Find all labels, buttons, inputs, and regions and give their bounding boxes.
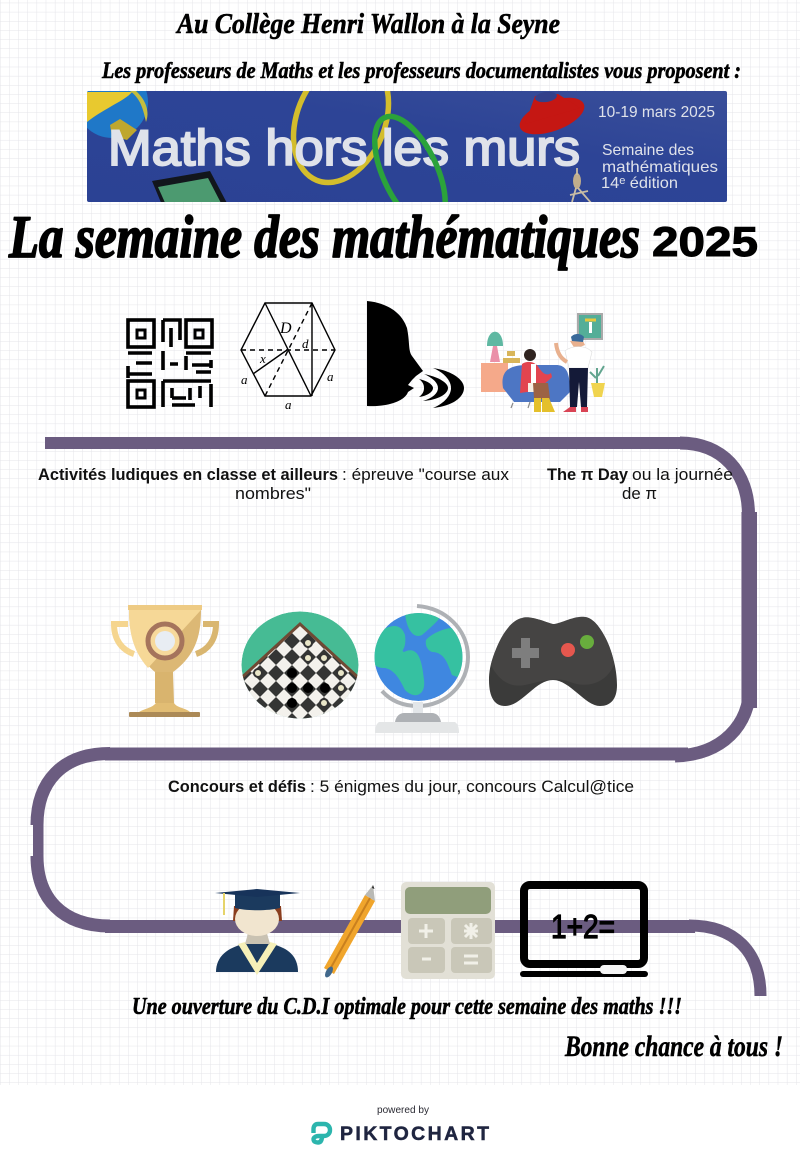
footer caption: powered by bbox=[377, 1104, 430, 1116]
icon: hexagon geometry: a bbox=[327, 369, 334, 384]
text: activities: Activités ludiques en classe et ailleurs bbox=[38, 465, 338, 484]
icon: hexagon geometry: D bbox=[279, 320, 292, 337]
books bbox=[503, 351, 520, 363]
main title: La semaine des mathématiques bbox=[8, 204, 640, 270]
icon: red cone bbox=[520, 92, 584, 134]
banner: Maths hors les murs bbox=[87, 91, 727, 202]
icon: trophy bbox=[114, 605, 216, 717]
plant bbox=[590, 366, 604, 383]
text: pi day bbox=[547, 465, 733, 503]
timeline path bbox=[33, 443, 760, 996]
banner subtitle bbox=[602, 144, 718, 188]
picture bbox=[577, 313, 603, 340]
woman bbox=[520, 362, 552, 393]
banner subtitle: 14ᵉ édition bbox=[601, 175, 678, 192]
banner title: Maths hors les murs bbox=[108, 120, 580, 176]
icon: QR code bbox=[128, 320, 212, 407]
lamp bbox=[487, 332, 503, 346]
text: pi day: The π Day bbox=[547, 465, 629, 484]
icon: Piktochart logo bbox=[314, 1124, 330, 1142]
icon: yellow hoop bbox=[290, 91, 392, 186]
icon: blackboard with sum: 1+2= bbox=[551, 908, 615, 945]
icon: game controller bbox=[489, 617, 617, 706]
text: activities: nombres" bbox=[235, 484, 311, 503]
icon: two people in living room bbox=[481, 313, 605, 412]
main title: 2025 bbox=[652, 218, 758, 265]
icon: checkers board bbox=[242, 612, 358, 718]
text: activities: : épreuve "course aux bbox=[342, 465, 510, 484]
cabinet bbox=[481, 363, 508, 392]
icon: hexagon geometry: d bbox=[302, 336, 309, 351]
icon: hexagon geometry: x bbox=[259, 351, 266, 366]
text: activities bbox=[38, 465, 510, 503]
text: CDI opening: Une ouverture du C.D.I optimale pour cette semaine des maths !!! bbox=[132, 994, 682, 1020]
text: pi day: ou la journée bbox=[632, 465, 733, 484]
icon: pencil bbox=[323, 885, 375, 979]
icon: volleyball bbox=[87, 91, 148, 140]
icon: blackboard with sum bbox=[520, 885, 648, 977]
sofa bbox=[502, 365, 570, 402]
banner dates: 10-19 mars 2025 bbox=[598, 104, 715, 121]
icon: hexagon geometry: a bbox=[241, 372, 248, 387]
text: contests: : 5 énigmes du jour, concours Calcul@tice bbox=[310, 777, 634, 796]
icon: green hoop bbox=[372, 114, 448, 202]
icon: graduate bbox=[215, 889, 300, 975]
icon: globe bbox=[370, 606, 468, 733]
icon: hexagon geometry bbox=[241, 303, 335, 412]
text: contests: Concours et défis bbox=[168, 777, 306, 796]
icon: hexagon geometry: a bbox=[285, 397, 292, 412]
man bbox=[570, 339, 585, 349]
icon: calculator bbox=[401, 882, 495, 979]
wordmark: PIKTOCHART bbox=[340, 1123, 489, 1145]
heading: school name: Au Collège Henri Wallon à la Seyne bbox=[175, 9, 560, 40]
text: pi day: de π bbox=[622, 484, 657, 503]
banner subtitle: mathématiques bbox=[602, 159, 718, 176]
footer: powered by Piktochart bbox=[0, 1085, 800, 1166]
banner subtitle: Semaine des bbox=[602, 142, 694, 159]
text: contests bbox=[168, 777, 634, 796]
icon: tablet bbox=[152, 171, 226, 202]
icon: compass bbox=[570, 168, 592, 204]
icon: speaking face bbox=[367, 301, 464, 408]
